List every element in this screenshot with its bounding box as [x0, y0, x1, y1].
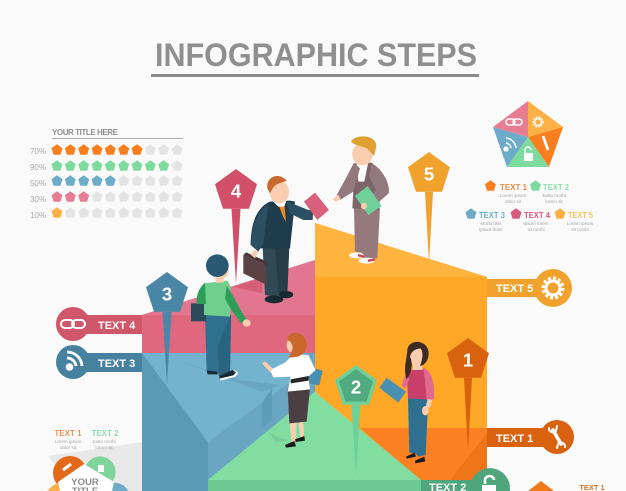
icon: gear — [543, 278, 563, 298]
bottom-left text labels: Lorem ipsum — [55, 439, 81, 444]
pentagon legend: lorem sit — [545, 199, 563, 204]
green step 2 block — [208, 392, 421, 491]
person: woman in pink top — [379, 342, 434, 463]
pentagon legend: TEXT 5 — [568, 210, 593, 220]
row 10%: 10% — [30, 211, 46, 220]
icon: wrench — [549, 426, 565, 448]
pin 5: 5 — [424, 164, 434, 184]
label: text 3 — [56, 345, 142, 379]
icon: small lock — [98, 465, 104, 472]
label: text 1 — [487, 420, 574, 454]
bottom-left circular diagram: YOUR — [71, 477, 99, 488]
pin 1 — [447, 338, 489, 452]
label: text 1: TEXT 1 — [496, 433, 533, 445]
pin 4: 4 — [231, 180, 242, 202]
title: INFOGRAPHIC STEPS — [155, 37, 477, 73]
bottom-left text labels: TEXT 2 — [91, 429, 119, 438]
pentagon legend: Lorem ipsum — [567, 221, 593, 226]
bottom-left text labels — [54, 429, 119, 450]
pentagon legend: Ipsum lorem — [523, 221, 549, 226]
bottom-left circular diagram — [48, 456, 128, 491]
row 50%: 50% — [30, 179, 46, 188]
label: text 5: TEXT 5 — [496, 283, 533, 295]
label: text 4: TEXT 4 — [98, 320, 136, 332]
row 70%: 70% — [30, 147, 46, 156]
rating chart: YOUR TITLE HERE — [52, 128, 119, 137]
orange step 1 and 5 block — [315, 223, 487, 480]
icon: chain — [61, 320, 85, 328]
blue step 3 block — [142, 353, 315, 491]
label: text 5 — [487, 269, 572, 307]
pin 4 — [215, 169, 257, 284]
label: text 4 — [56, 307, 142, 341]
pin 3 — [146, 272, 188, 384]
pentagon legend: TEXT 2 — [543, 182, 569, 192]
bottom-left text labels: Justo morbi — [92, 439, 116, 444]
pin 3: 3 — [162, 284, 172, 304]
person: man with green folder — [333, 136, 389, 264]
bottom-left text labels: TEXT 1 — [54, 429, 82, 438]
pentagon diagram — [493, 101, 563, 167]
person: curly-haired man in green — [191, 254, 251, 381]
row 10% — [30, 207, 182, 220]
pin 1: 1 — [463, 350, 473, 370]
pentagon legend: sit morbi — [527, 227, 545, 232]
icon: wifi — [66, 352, 82, 371]
pentagon legend: Lorem ipsum — [500, 193, 526, 198]
pentagon legend: Justo morbi — [542, 193, 566, 198]
pentagon legend — [466, 180, 593, 232]
rating chart — [30, 128, 183, 220]
pentagon legend: TEXT 4 — [524, 210, 550, 220]
person: woman in white blouse — [262, 333, 323, 448]
pin 2: 2 — [351, 376, 361, 398]
pin 5 — [408, 152, 450, 263]
bottom-left text labels: dolor sit — [60, 445, 77, 450]
row 30%: 30% — [30, 195, 46, 204]
icon: lock — [482, 476, 496, 491]
pink step 4 block — [142, 260, 315, 353]
pentagon legend: Morbi felis — [481, 221, 502, 226]
row 90%: 90% — [30, 163, 46, 172]
person: man in suit with briefcase — [243, 176, 329, 303]
pentagon legend: dolor sit — [505, 199, 522, 204]
label: text 2 — [421, 468, 510, 491]
row 30% — [30, 191, 182, 204]
row 90% — [30, 160, 182, 172]
bottom-left text labels: lorem sit — [95, 445, 113, 450]
pin 2 — [335, 365, 377, 477]
row 70% — [30, 144, 182, 156]
row 50% — [30, 175, 182, 188]
icon: small wrench — [63, 464, 71, 470]
label: text 3: TEXT 3 — [98, 358, 135, 370]
pentagon legend: ipsum dolor — [479, 227, 503, 232]
pentagon legend: TEXT 3 — [479, 210, 505, 220]
pentagon legend: sit morbi — [571, 227, 589, 232]
pentagon legend: TEXT 1 — [500, 182, 527, 192]
bottom-right pentagon and label — [528, 481, 605, 491]
